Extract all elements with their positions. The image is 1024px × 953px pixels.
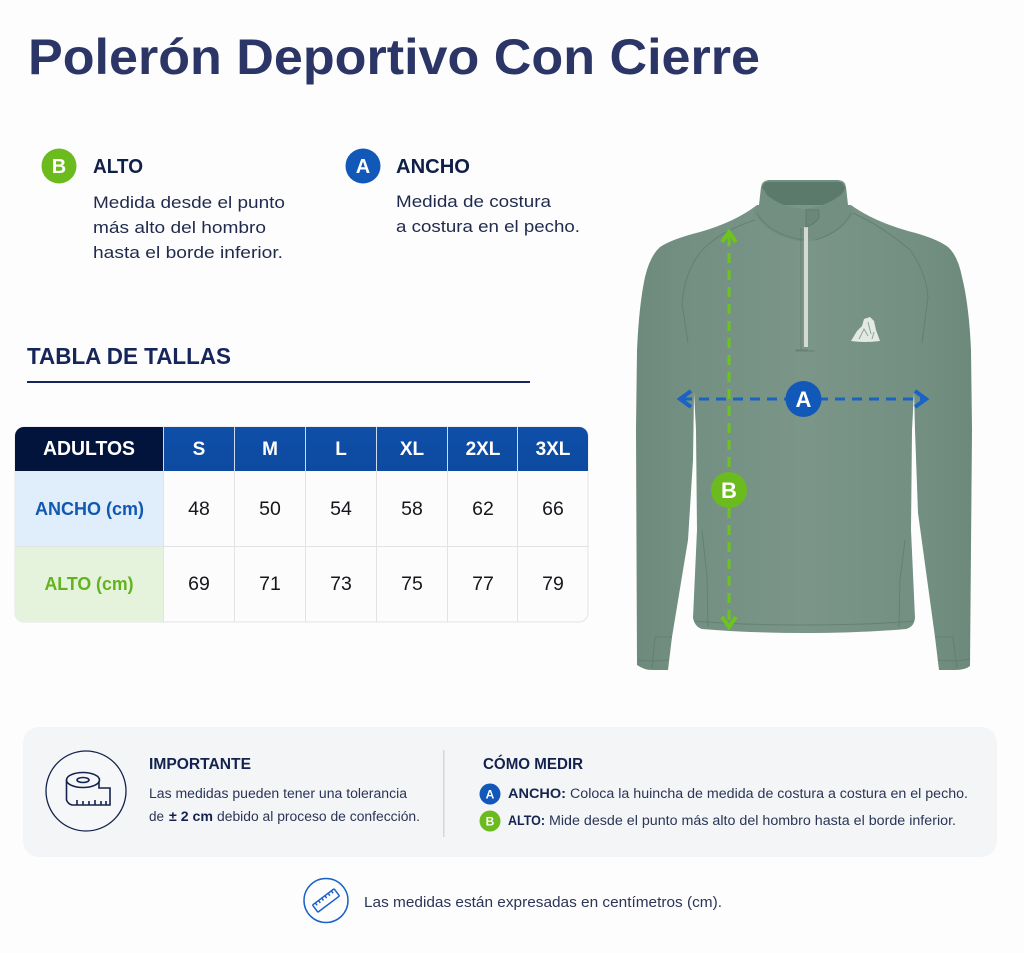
- row: ancho: 48: [188, 498, 210, 520]
- sleeves and body: [636, 205, 972, 670]
- logo emblem: [851, 317, 880, 342]
- collar back: [759, 180, 848, 208]
- seams: [638, 213, 970, 668]
- title: Polerón Deportivo Con Cierre: [28, 29, 760, 85]
- how to: alto: ALTO:: [508, 813, 545, 828]
- how to: alto: [480, 810, 956, 832]
- placket: [806, 210, 819, 227]
- how to: ancho: A: [486, 788, 495, 802]
- description alto: [93, 193, 285, 262]
- heading: tabla de tallas: TABLA DE TALLAS: [27, 343, 231, 369]
- marker A: [786, 381, 822, 417]
- description ancho: Medida de costura: [396, 192, 552, 211]
- row: alto: 77: [472, 573, 494, 595]
- row: alto: 73: [330, 573, 352, 595]
- how to: ancho: Coloca la huincha de medida de costura a costura en el pecho.: [570, 786, 968, 801]
- table header row: [15, 427, 588, 471]
- arrow: height B: [711, 232, 747, 627]
- heading ancho: ANCHO: [396, 156, 470, 178]
- badge A: [346, 148, 380, 184]
- row: ancho: 58: [401, 498, 423, 520]
- marker B: B: [721, 478, 737, 503]
- row: alto: 69: [188, 573, 210, 595]
- footer text: Las medidas están expresadas en centímetros (cm).: [364, 895, 722, 911]
- icon: ruler: [304, 878, 348, 922]
- row: ancho: 50: [259, 498, 281, 520]
- row: alto: 71: [259, 573, 281, 595]
- collar front: [754, 187, 854, 241]
- table header row: M: [262, 439, 278, 460]
- important text: de: [149, 809, 164, 824]
- description alto: más alto del hombro: [93, 218, 266, 237]
- badge A: A: [356, 156, 370, 178]
- arrow: width A: [680, 381, 926, 417]
- table header row: XL: [400, 439, 425, 460]
- table header row: 3XL: [536, 439, 571, 460]
- legend: ancho: [346, 148, 580, 236]
- heading alto: ALTO: [93, 156, 143, 178]
- how to measure: [480, 754, 968, 832]
- table header row: 2XL: [466, 439, 501, 460]
- icon: measuring tape: [46, 751, 126, 831]
- garment: green zip sweatshirt: [636, 180, 972, 670]
- row: alto: 75: [401, 573, 423, 595]
- row: ancho: 62: [472, 498, 494, 520]
- badge B: B: [52, 156, 66, 178]
- legend: alto: [42, 148, 285, 262]
- row: alto: ALTO (cm): [44, 574, 134, 594]
- table header row: S: [193, 439, 205, 460]
- description alto: hasta el borde inferior.: [93, 243, 283, 262]
- row: ancho: 54: [330, 498, 352, 520]
- how to: ancho: [480, 784, 968, 804]
- row: ancho: ANCHO (cm): [35, 499, 144, 519]
- row: ancho: 66: [542, 498, 564, 520]
- important text: [149, 756, 420, 824]
- marker B: [711, 472, 747, 508]
- description ancho: [396, 192, 580, 236]
- table header row: ADULTOS: [43, 438, 135, 460]
- zipper: [804, 227, 808, 347]
- badge B: [42, 148, 76, 184]
- important text: Las medidas pueden tener una tolerancia: [149, 786, 407, 801]
- important text: ± 2 cm: [169, 809, 213, 824]
- row: alto: 79: [542, 573, 564, 595]
- marker A: A: [796, 387, 812, 412]
- table header row: L: [335, 439, 347, 460]
- how to measure: CÓMO MEDIR: [483, 754, 583, 773]
- row: ancho: [15, 471, 564, 546]
- important text: debido al proceso de confección.: [217, 809, 420, 824]
- footer note: [304, 878, 722, 922]
- row: alto: [15, 546, 564, 622]
- important text: IMPORTANTE: [149, 756, 251, 773]
- description ancho: a costura en el pecho.: [396, 217, 580, 236]
- how to: alto: B: [486, 814, 495, 828]
- how to: alto: Mide desde el punto más alto del hombro hasta el borde inferior.: [549, 813, 956, 828]
- description alto: Medida desde el punto: [93, 193, 285, 212]
- size table: [15, 427, 588, 622]
- how to: ancho: ANCHO:: [508, 786, 566, 801]
- panel: important notes: [23, 727, 997, 857]
